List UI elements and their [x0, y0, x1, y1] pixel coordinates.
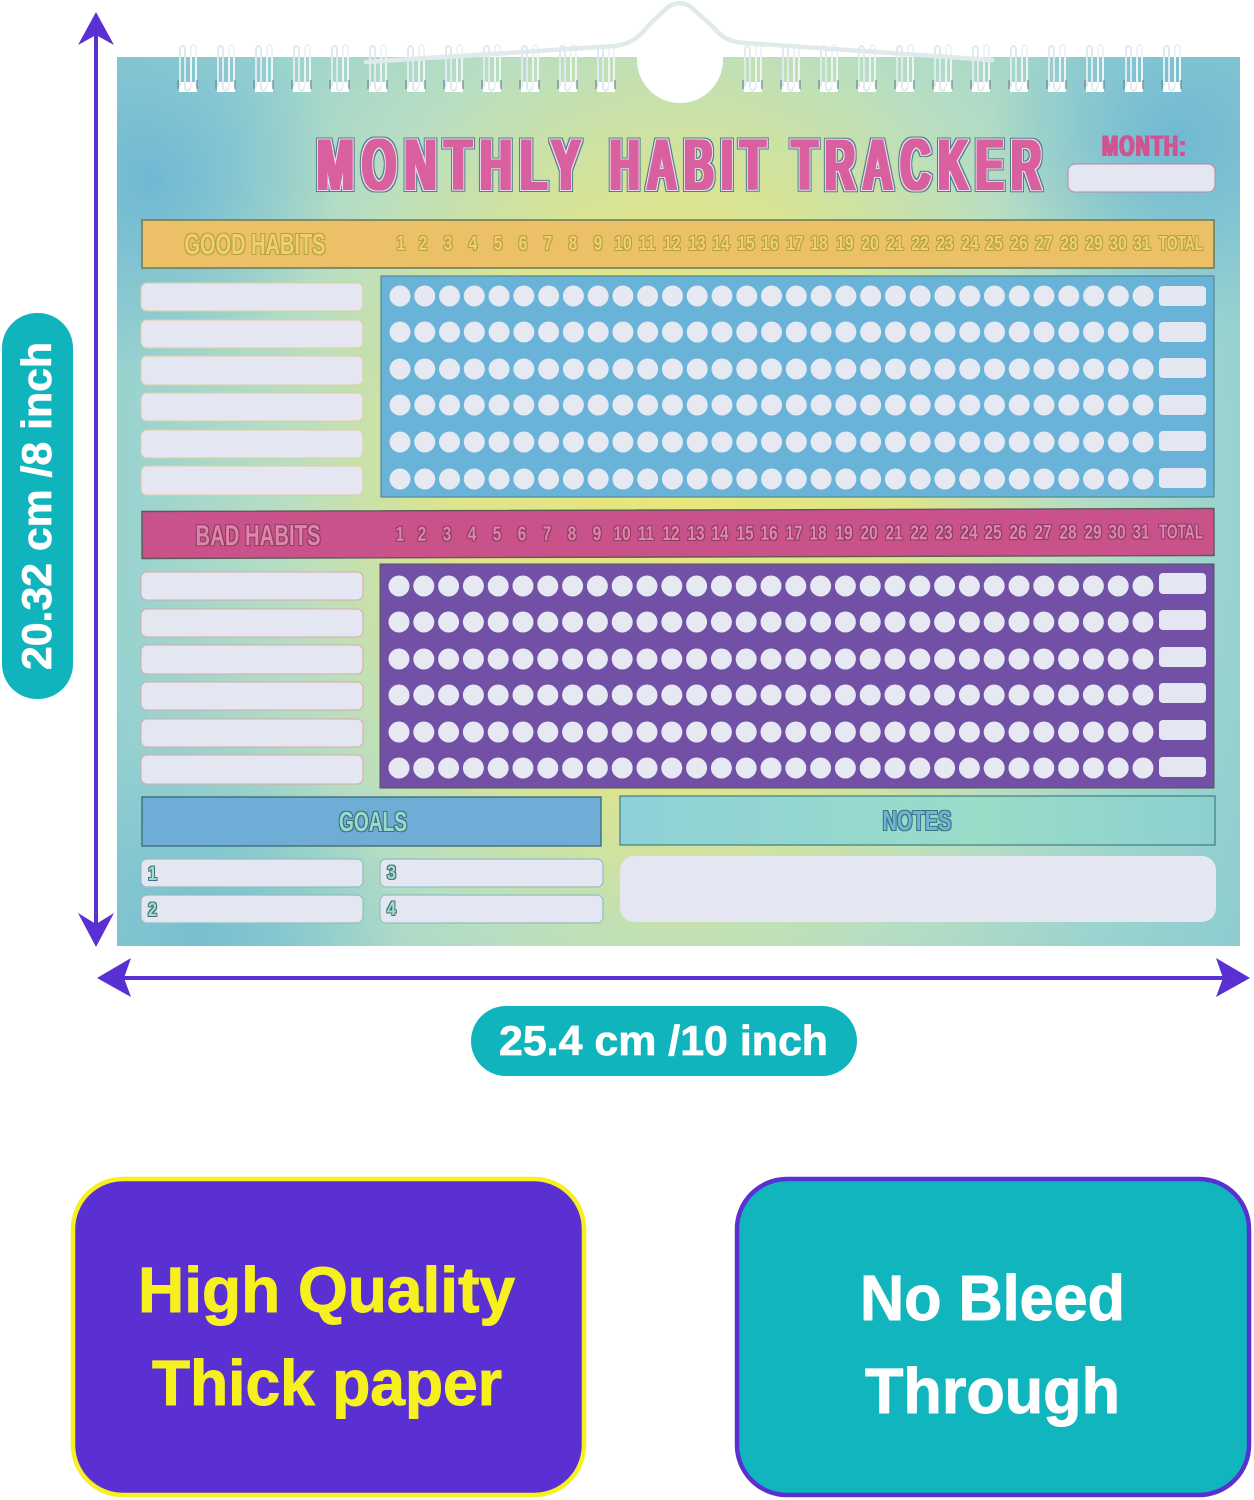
good habits day numbers: 21 — [886, 232, 904, 254]
goals header: GOALS — [339, 806, 407, 837]
good habits day numbers: 7 — [544, 232, 552, 254]
bad habits header — [142, 509, 1214, 558]
good habits day numbers: 16 — [761, 232, 779, 254]
good habits day numbers: 3 — [444, 232, 452, 254]
title: TRACKER — [792, 125, 1049, 206]
good habit name boxes — [141, 283, 363, 495]
bad habits day numbers: 31 — [1132, 521, 1150, 543]
good habits day numbers: 1 — [397, 232, 405, 254]
bad habits day numbers: 16 — [760, 522, 778, 544]
bad habits day numbers: TOTAL — [1159, 522, 1203, 544]
bad habits day numbers: 10 — [613, 522, 631, 545]
bad habits day numbers: 27 — [1034, 521, 1052, 543]
bad habits day numbers: 15 — [736, 522, 754, 544]
callout: high quality thick paper — [73, 1179, 584, 1495]
good habits day numbers: 6 — [519, 232, 527, 254]
month input box — [1068, 164, 1215, 192]
good habits day numbers: 2 — [419, 232, 427, 254]
notes header — [620, 796, 1215, 845]
bad habits day numbers: 26 — [1009, 521, 1027, 544]
callout: no bleed through: Through — [865, 1355, 1120, 1427]
goal boxes: 1 — [148, 864, 157, 885]
good habits day numbers: 8 — [569, 232, 577, 254]
bad habits day numbers: 4 — [468, 523, 476, 545]
good habits day numbers: 4 — [469, 232, 477, 254]
good habits day numbers: 12 — [663, 232, 681, 254]
bad habits day numbers: 2 — [418, 523, 426, 545]
month label: MONTH: — [1102, 130, 1187, 163]
bad habits day numbers: 12 — [662, 522, 680, 545]
callout: high quality thick paper: High Quality — [138, 1254, 515, 1326]
bad habits day numbers: 19 — [835, 522, 853, 544]
height label pill: 20.32 cm /8 inch — [13, 342, 60, 670]
calendar sheet — [117, 17, 1240, 946]
title — [317, 125, 1049, 206]
good habits day numbers: 19 — [836, 232, 854, 254]
goal boxes: 4 — [387, 899, 396, 920]
good habits day numbers: 25 — [985, 232, 1003, 254]
bad habits day numbers: 17 — [785, 522, 803, 544]
goal boxes: 3 — [387, 863, 396, 884]
callout: no bleed through: No Bleed — [860, 1262, 1125, 1334]
height dimension arrow — [78, 12, 114, 947]
bad habits day numbers: 23 — [935, 521, 953, 544]
good habits label: GOOD HABITS — [184, 229, 326, 261]
bad habits day numbers: 18 — [809, 522, 827, 544]
good habits day numbers: TOTAL — [1159, 233, 1203, 255]
good habits tracking grid — [381, 276, 1214, 497]
bad habits day numbers: 29 — [1084, 521, 1102, 543]
good habits day numbers: 11 — [639, 232, 655, 254]
bad habits day numbers: 7 — [543, 523, 551, 545]
spiral binding left — [178, 45, 615, 92]
notes box — [620, 856, 1216, 922]
bad habits day numbers: 30 — [1108, 521, 1126, 543]
bad habits day numbers: 28 — [1059, 521, 1077, 543]
goal boxes: 2 — [148, 900, 157, 921]
good habits header — [142, 220, 1214, 268]
bad habits day numbers: 5 — [493, 523, 501, 545]
title: HABIT — [610, 125, 773, 206]
good habits day numbers: 17 — [786, 232, 804, 254]
bad habits day numbers: 20 — [860, 522, 878, 544]
good habits day numbers: 28 — [1060, 232, 1078, 254]
callout: no bleed through — [737, 1179, 1249, 1495]
bad habits total boxes — [1159, 573, 1206, 777]
good habits day numbers: 14 — [712, 232, 730, 254]
bad habits label: BAD HABITS — [195, 520, 321, 552]
bad habits day numbers: 9 — [593, 522, 601, 545]
good habits day numbers: 13 — [688, 232, 706, 254]
hanging wire hook — [366, 3, 992, 62]
bad habits day numbers: 13 — [687, 522, 705, 544]
bad habits tracking grid — [380, 564, 1214, 788]
bad habits day numbers: 25 — [984, 521, 1002, 544]
bad habits day numbers: 11 — [638, 522, 654, 545]
good habits day numbers: 29 — [1085, 232, 1103, 254]
height label pill — [2, 313, 73, 699]
spiral binding right — [743, 45, 1181, 92]
bad habit name boxes — [141, 572, 363, 784]
good habits day numbers: 18 — [810, 232, 828, 254]
good habits day numbers: 31 — [1133, 232, 1151, 254]
goals header — [142, 797, 601, 846]
width label pill: 25.4 cm /10 inch — [499, 1017, 828, 1064]
good habits day numbers: 5 — [494, 232, 502, 254]
width dimension arrow — [97, 958, 1250, 997]
bad habits day numbers: 6 — [518, 523, 526, 545]
callout: high quality thick paper: Thick paper — [152, 1347, 502, 1419]
good habits day numbers: 24 — [961, 232, 979, 254]
good habits day numbers: 26 — [1010, 232, 1028, 254]
good habits day numbers: 30 — [1109, 232, 1127, 254]
good habits day numbers: 10 — [614, 232, 632, 254]
good habits day numbers: 22 — [911, 232, 929, 254]
bad habits day numbers — [396, 521, 1203, 546]
good habits day numbers: 20 — [861, 232, 879, 254]
bad habits day numbers: 8 — [568, 522, 576, 545]
notes header: NOTES — [882, 805, 952, 836]
bad habits day numbers: 22 — [910, 521, 928, 544]
good habits day numbers: 27 — [1035, 232, 1053, 254]
hanging hole — [637, 17, 723, 103]
good habits total boxes — [1159, 286, 1206, 488]
bad habits day numbers: 14 — [711, 522, 729, 544]
good habits day numbers: 9 — [594, 232, 602, 254]
bad habits day numbers: 24 — [960, 521, 978, 544]
good habits day numbers: 15 — [737, 232, 755, 254]
good habits day numbers — [397, 232, 1203, 255]
title: MONTHLY — [317, 125, 589, 206]
good habits day numbers: 23 — [936, 232, 954, 254]
bad habits day numbers: 21 — [885, 522, 903, 544]
goal boxes — [141, 859, 603, 923]
bad habits day numbers: 3 — [443, 523, 451, 545]
bad habits day numbers: 1 — [396, 523, 404, 545]
width label pill — [471, 1006, 857, 1076]
